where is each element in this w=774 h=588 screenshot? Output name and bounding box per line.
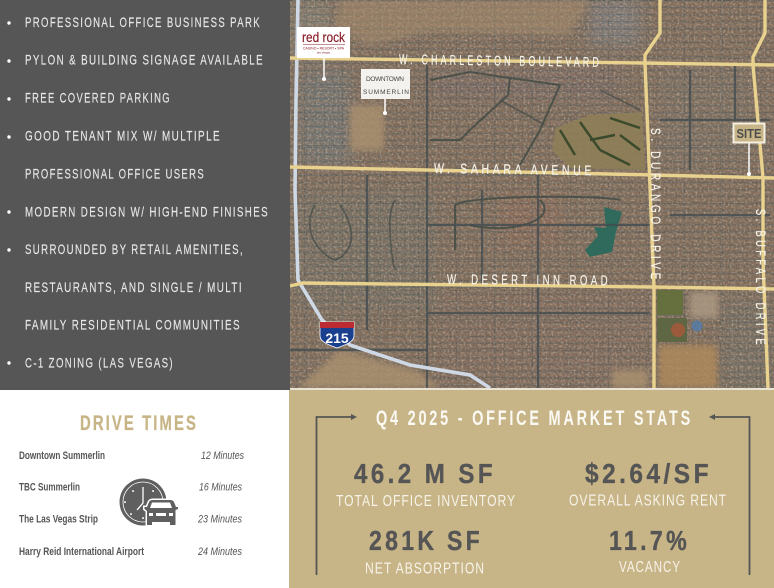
road label: Durango: S. DURANGO DRIVE [648, 128, 664, 283]
row: The Las Vegas Strip [19, 514, 242, 526]
map terrain patches [290, 0, 774, 388]
row: TBC Summerlin: 16 Minutes [199, 482, 242, 494]
bullet list: FAMILY RESIDENTIAL COMMUNITIES [25, 316, 241, 332]
stat: vacancy: 11.7% [609, 525, 690, 556]
bullet list: SURROUNDED BY RETAIL AMENITIES, [25, 241, 244, 257]
bullet list: PYLON & BUILDING SIGNAGE AVAILABLE [25, 52, 264, 68]
park [657, 290, 702, 342]
marker: Downtown Summerlin: DOWNTOWN [366, 76, 404, 83]
golf course [552, 112, 645, 170]
stat: net absorption [365, 525, 485, 578]
curved neighbourhood streets [310, 90, 640, 270]
row: The Las Vegas Strip: 23 Minutes [197, 514, 242, 526]
icon: I-215 shield: 215 [325, 330, 349, 346]
stat: asking rent: OVERALL ASKING RENT [569, 492, 727, 510]
lake [585, 207, 622, 257]
aerial map [290, 0, 774, 388]
marker: site [734, 124, 764, 176]
stat: net absorption: NET ABSORPTION [365, 560, 485, 578]
marker: red rock: CASINO • RESORT • SPA [303, 46, 345, 50]
marker: red rock: red rock [302, 29, 346, 45]
row: TBC Summerlin [19, 482, 242, 494]
streets: dark arterials [290, 65, 770, 388]
stat: inventory: 46.2 M SF [354, 458, 496, 489]
stat: asking rent [569, 458, 727, 510]
stat: net absorption: 281K SF [369, 525, 483, 556]
road: W. Sahara [290, 167, 774, 178]
bullet list: MODERN DESIGN W/ HIGH-END FINISHES [25, 204, 269, 220]
row: TBC Summerlin: TBC Summerlin [19, 482, 80, 494]
row: Harry Reid International Airport: Harry Reid International Airport [19, 546, 144, 558]
wash paths [430, 72, 620, 250]
marker: red rock: las Vegas [317, 50, 331, 54]
row: The Las Vegas Strip: The Las Vegas Strip [19, 514, 98, 526]
panel: property highlights [0, 0, 290, 390]
arrow: right bracket [709, 414, 750, 575]
bullet list: C-1 ZONING (LAS VEGAS) [25, 354, 174, 370]
arrow: left bracket [316, 414, 357, 575]
row: Harry Reid International Airport: 24 Minutes [197, 546, 242, 558]
stat: inventory: TOTAL OFFICE INVENTORY [336, 493, 516, 510]
road label: Charleston: W. CHARLESTON BOULEVARD [399, 51, 602, 70]
stat: vacancy [609, 525, 690, 576]
marker: Downtown Summerlin [361, 69, 410, 115]
strip beneath map [290, 388, 774, 390]
road: W. Desert Inn [290, 283, 774, 289]
road label: Buffalo: S. BUFFALO DRIVE [753, 209, 769, 348]
road: S. Durango [645, 0, 660, 388]
row: Downtown Summerlin: 12 Minutes [201, 450, 244, 462]
bullet list [7, 14, 269, 370]
bullet list: GOOD TENANT MIX W/ MULTIPLE [25, 128, 221, 144]
row: Downtown Summerlin: Downtown Summerlin [19, 450, 105, 462]
bullet list: PROFESSIONAL OFFICE BUSINESS PARK [25, 14, 261, 30]
stat: inventory [336, 458, 516, 510]
bullet list: PROFESSIONAL OFFICE USERS [25, 166, 205, 182]
road: W. Charleston [290, 58, 774, 65]
row: Downtown Summerlin [19, 450, 244, 462]
marker: red rock [297, 27, 350, 81]
stat: vacancy: VACANCY [619, 559, 681, 576]
icon: I-215 shield [320, 322, 354, 348]
panel: drive times [0, 390, 289, 588]
bullet list: FREE COVERED PARKING [25, 90, 171, 106]
marker: Downtown Summerlin: SUMMERLIN [363, 89, 409, 96]
road label: Desert Inn: W. DESERT INN ROAD [447, 271, 611, 288]
panel: office market stats [289, 390, 774, 588]
stat: asking rent: $2.64/SF [585, 458, 712, 489]
bullet list: RESTAURANTS, AND SINGLE / MULTI [25, 279, 243, 295]
bare desert patches [298, 0, 718, 388]
marker: site: SITE [736, 127, 762, 141]
road label: Sahara: W. SAHARA AVENUE [434, 160, 595, 178]
icon: clock and car [120, 478, 178, 526]
heading: drive times: DRIVE TIMES [80, 412, 198, 435]
road: S. Buffalo [753, 0, 768, 388]
freeway I-215 [295, 0, 490, 388]
